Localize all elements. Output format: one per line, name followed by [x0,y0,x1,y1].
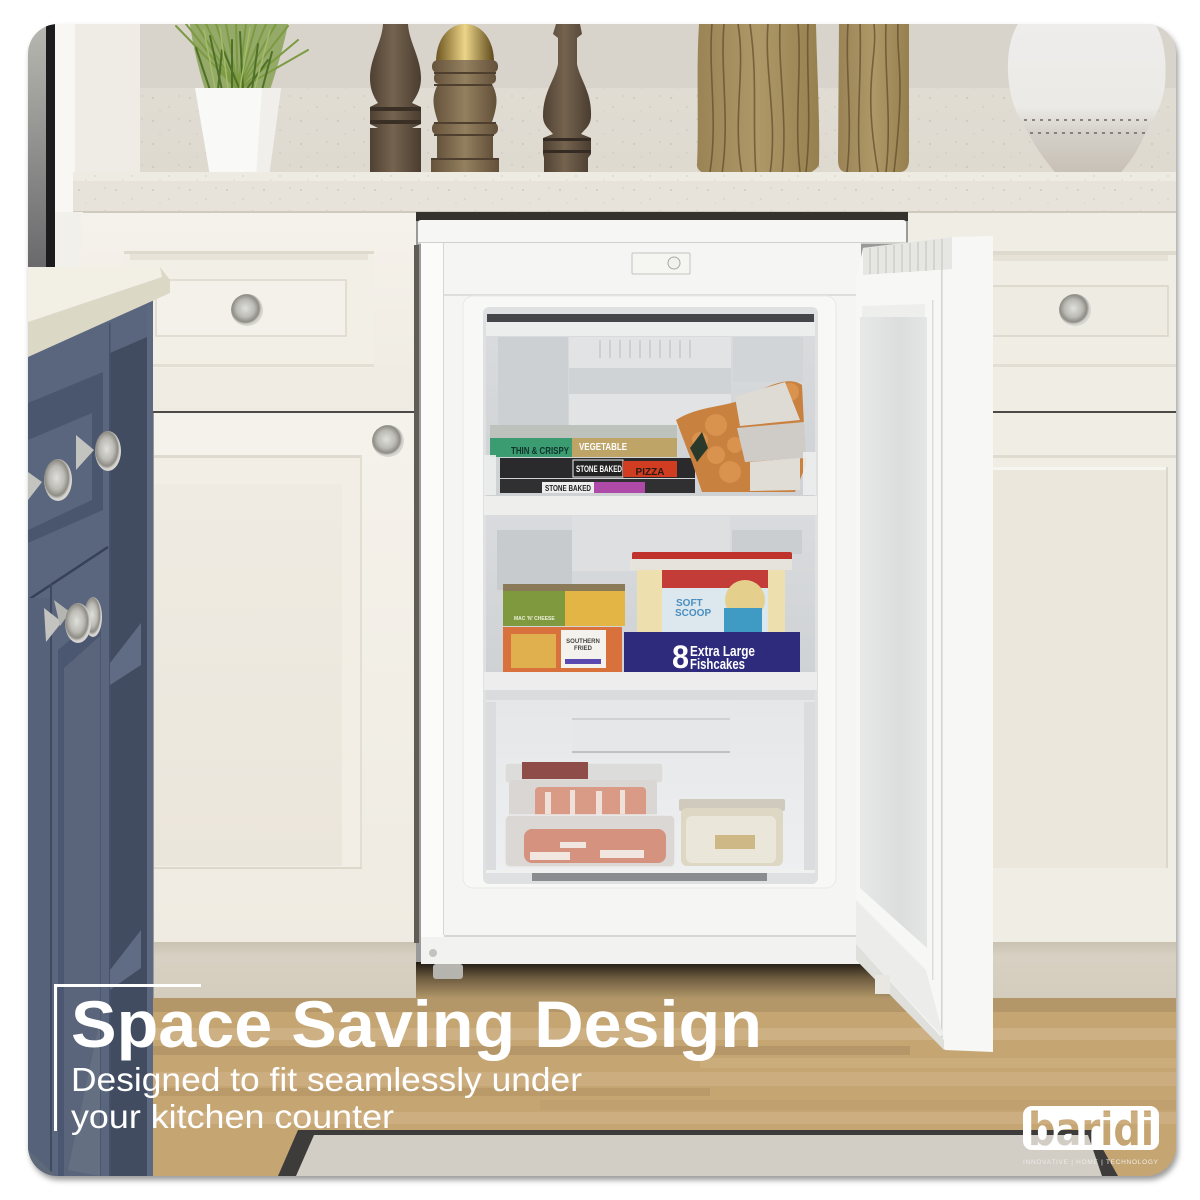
floor mat [278,1130,1118,1176]
lower door [28,598,50,1176]
caption: heading: Space Saving Design [71,987,762,1061]
fishcakes box: Extra Large [690,644,755,660]
freezer body [421,243,861,964]
inner cavity [483,307,818,884]
shadow under freezer [416,962,893,998]
fishcakes box: 8 [672,639,689,675]
bag of carrots [676,381,806,492]
southern fried box: FRIED [574,646,593,652]
door molding [154,455,362,869]
door foot [875,975,890,994]
navy kitchen island [28,267,170,1176]
brand logo [1015,1100,1165,1166]
drawer knob [1059,294,1091,326]
lower door pocket [856,900,944,1038]
back wall [28,24,1176,274]
fishcakes box: Fishcakes [690,657,745,673]
caption: subheading: your kitchen counter [71,1098,394,1135]
ceramic vase [1008,24,1166,176]
bottom drawer [486,690,815,872]
upper drawer panel [28,372,103,543]
ice cream tub [630,552,792,632]
screw [429,949,437,957]
door liner [860,317,927,948]
door top vent [863,237,952,275]
ice cream tub: SCOOP [675,608,711,619]
fishcakes box [624,632,800,675]
freezer [416,212,993,1052]
meat tray upper [505,762,663,821]
meat tray lower [505,815,675,867]
open door [856,236,993,1052]
island knobs [28,431,121,643]
second stone baked box [500,479,695,493]
southern fried box: SOUTHERN [566,639,600,645]
drawer knob [231,294,263,326]
stone baked pizza box: STONE BAKED [576,464,622,475]
pepper mill left [370,24,421,172]
caption: subheading: Designed to fit seamlessly under [71,1061,582,1098]
dark side recess [110,337,147,1176]
right base cabinet [908,213,1176,998]
top shelf front lip [484,496,817,515]
raised drawer front [156,280,346,336]
dark gap under counter [416,212,908,221]
stone baked pizza box: PIZZA [636,467,664,478]
pepper mill right [543,24,591,172]
cabinet top lid [418,220,906,244]
thin and crispy pizza box: THIN & CRISPY [511,445,569,457]
thin and crispy pizza box [490,425,677,457]
caption: bracket line [54,984,201,1131]
ice cream tub: SOFT [676,598,703,609]
countertop [73,172,1176,213]
foot [433,964,463,979]
wooden blocks [697,24,909,175]
mac and cheese box [503,584,625,626]
plant in white pot [176,24,308,176]
raised drawer front [990,286,1168,336]
mac and cheese box: MAC 'N' CHEESE [514,616,555,622]
stone baked pizza box [500,458,695,478]
door knob [372,425,404,457]
brand logo: INNOVATIVE | HOME | TECHNOLOGY [1023,1159,1159,1166]
thin and crispy pizza box: VEGETABLE [579,441,627,453]
caption: subheading [71,1061,582,1135]
leftovers tub [679,799,785,866]
cream counter top [28,267,170,357]
southern fried box [503,627,622,672]
wooden floor [150,998,1176,1176]
left base cabinet [55,212,419,998]
middle drawer [486,530,815,672]
second stone baked box: STONE BAKED [545,483,591,493]
top drawer [484,322,816,497]
middle shelf front lip [484,672,817,690]
control panel [632,253,690,274]
pepper mill gold top [431,24,499,175]
